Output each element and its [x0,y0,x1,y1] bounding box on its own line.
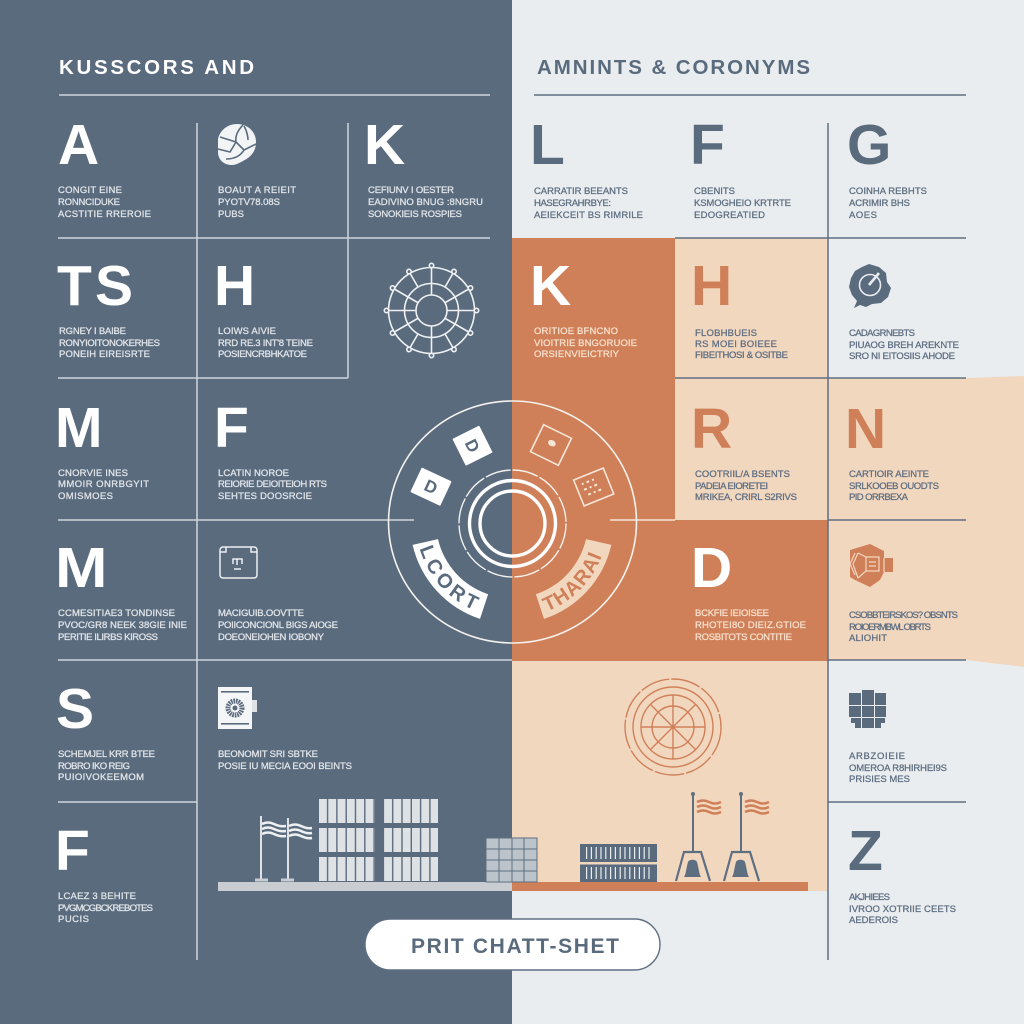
cell: seal [849,264,959,362]
description: OMEROA R8HIRHEI9S [849,763,947,774]
description A: RONNCIDUKE [58,197,120,208]
letter K: K [530,254,571,318]
description F right [694,186,791,221]
description TS: RGNEY I BAIBE [59,326,126,337]
description: DOEONEIOHEN IOBONY [218,632,325,643]
letter D: D [691,536,732,600]
description R: MRIKEA, CRIRL S2RIVS [695,492,797,503]
description F right: EDOGREATIED [694,210,765,221]
letter F: F [690,113,725,177]
letter F: F [214,396,249,460]
description: MACIGUIB.OOVTTE [218,608,304,619]
description H peach [695,328,788,361]
description R: PADEIA EIORETEI [695,481,768,492]
description: ARBZOIEIE [849,751,905,762]
description M second [58,608,187,643]
description M second: PVOC/GR8 NEEK 38GIE INIE [58,620,187,631]
cell: TS [57,254,160,360]
description N: PID ORRBEXA [849,492,909,503]
letters TS: S [95,254,133,318]
description: PIUAOG BREH AREKNTE [849,340,959,351]
tile: D left [410,467,452,506]
letter F: F [55,819,90,883]
tile: D left: D [421,476,440,498]
cell: F [214,396,327,502]
description: PRISIES MES [849,774,910,785]
description H: LOIWS AIVIE [218,326,276,337]
description M: OMISMOES [58,491,113,502]
description TS: RONYIOITONOKERHES [59,338,160,349]
description G: COINHA REBHTS [849,186,927,197]
description: ROIOERMBWL OBRTS [849,622,931,633]
icon: target rings [625,679,721,775]
description [849,751,947,785]
description H [218,326,313,360]
description TS [59,326,160,360]
description A: ACSTITIE RREROIE [58,209,151,220]
dial outer ring [388,401,636,643]
illustration: bell tower 2 [724,792,769,881]
description: ALIOHIT [849,633,887,644]
letter R: R [691,397,732,461]
tile: outlined top right [530,425,572,465]
letter M: M [55,396,102,460]
description [218,185,296,220]
description F bottom: PUCIS [58,914,89,925]
description K: SONOKIEIS ROSPIES [368,209,462,220]
cell: S [56,677,155,783]
description M second: CCMESITIAE3 TONDINSE [58,608,175,619]
description: POSIE IU MECIA EOOI BEINTS [218,761,352,772]
description S: ROBRO IKO REIG [58,761,130,772]
tile: D top: D [461,436,483,456]
description N: CARTIOIR AEINTE [849,469,929,480]
description F bottom: PVGMCGBCKREBOTES [58,903,153,914]
description K: CEFIUNV I OESTER [368,185,454,196]
tile: outlined right [574,468,614,506]
background: left slate half [0,0,512,1024]
description L: AEIEKCEIT BS RIMRILE [534,210,643,221]
illustration: bell tower 1 [676,792,721,881]
description M: MMOIR ONRBGYIT [58,479,149,490]
description A: CONGIT EINE [58,185,122,196]
icon: spoked wheel [384,263,479,358]
description: CSOBBTEIRSKOS? OBSNTS [849,610,958,621]
letters TS: T [57,254,92,318]
description S [58,749,155,783]
tile: D top [452,426,493,466]
description F: SEHTES DOOSRCIE [218,491,312,502]
description F bottom: LCAEZ 3 BEHITE [58,891,136,902]
description H peach: FLOBHBUEIS [695,328,757,339]
description K: EADIVINO BNUG :8NGRU [368,197,483,208]
description TS: PONEIH EIREISRTE [59,349,150,360]
letter G: G [847,113,891,177]
description H peach: RS MOEI BOIEEE [695,339,777,350]
description H: RRD RE.3 INT'8 TEINE [218,338,313,349]
arc label: right: THARAI [541,552,602,610]
central dial [388,400,638,644]
letter M: M [55,536,108,600]
peach region: lower panel [512,660,828,891]
cell: M [55,396,149,502]
peach region: right band [828,376,1024,667]
description M [58,468,149,502]
description D: BCKFIE IEIOISEE [695,608,769,619]
illustration: left flags [255,816,312,880]
description Z [849,892,956,926]
cell: H [214,254,313,360]
orange region: upper block [512,238,675,521]
letter K: K [364,113,405,177]
cell: G [847,113,927,221]
cell: R [691,397,797,503]
ground: left grey [218,882,512,891]
description L [534,186,643,221]
illustration: container stacks [319,799,438,881]
description [849,328,959,362]
description D [695,608,806,643]
heading: right: AMNINTS & CORONYMS [537,56,810,79]
letter S: S [56,677,94,741]
description: BEONOMIT SRI SBTKE [218,749,318,760]
description R [695,469,797,503]
description F right: CBENITS [694,186,735,197]
description D: RHOTEI8O DIEIZ.GTIOE [695,620,806,631]
icon: hexagon badge [850,544,893,587]
cell: globe [218,124,296,220]
letter A: A [58,113,99,177]
cell: F bottom [55,819,153,925]
icon: safe [218,687,257,729]
description M: CNORVIE INES [58,468,128,479]
cell: F right [690,113,791,221]
description: SRO NI EITOSIIS AHODE [849,351,955,362]
description [218,608,338,643]
icon: seal [849,264,891,308]
description L: HASEGRAHRBYE: [534,198,611,209]
illustration: grid crate [486,838,537,882]
description K orange: VIOITRIE BNGORUOIE [534,338,637,349]
letter H: H [214,254,255,318]
cell: A [58,113,151,220]
dial inner rings [470,480,556,566]
letter H: H [691,254,732,318]
illustration: slate container [580,844,657,882]
description N: SRLKOOEB OUODTS [849,481,939,492]
description D: ROSBITOTS CONTITIE [695,632,792,643]
description: BOAUT A REIEIT [218,185,296,196]
description R: COOTRIIL/A BSENTS [695,469,790,480]
description K orange: ORSIENVIEICTRIY [534,349,620,360]
dial dashed ring [459,470,566,577]
cell: H peach [691,254,788,361]
icon: globe [218,124,256,165]
description N [849,469,939,503]
arc label: left: LCORT [420,544,480,608]
description Z: AEDEROIS [849,915,898,926]
cell: Z [848,819,956,926]
letter N: N [845,397,886,461]
description H peach: FIBEITHOSI & OSITBE [695,350,788,361]
cell: M second [55,536,187,643]
description M second: PERITIE ILIRBS KIROSS [58,632,158,643]
icon: grid emblem [849,690,886,728]
description F [218,468,327,502]
description G: ACRIMIR BHS [849,198,910,209]
cell: hexagon [849,544,958,644]
orange region: lower block [512,520,828,661]
description K orange [534,326,637,360]
description F right: KSMOGHEIO KRTRTE [694,198,791,209]
description: PYOTV78.08S [218,197,280,208]
description F bottom [58,891,153,925]
peach region: centre column [675,238,828,528]
button: print cheat sheet: PRIT CHATT-SHET [411,935,619,958]
cell: frame [218,547,338,643]
cell: D [691,536,806,643]
description F: LCATIN NOROE [218,468,289,479]
description A [58,185,151,220]
description S: SCHEMJEL KRR BTEE [58,749,155,760]
cell: K orange [530,254,637,360]
description G: AOES [849,210,877,221]
cell: safe [218,687,352,772]
cell: N [845,397,939,503]
description Z: AKJHIEES [849,892,890,903]
description F: REIORIE DEIOITEIOH RTS [218,479,327,490]
button: print cheat sheet [365,919,660,970]
description Z: IVROO XOTRIIE CEETS [849,904,956,915]
letter Z: Z [848,819,883,883]
description: POIICONCIONL BIGS AIOGE [218,620,338,631]
description G [849,186,927,221]
description [218,749,352,772]
letter L: L [530,113,565,177]
description: CADAGRNEBTS [849,328,915,339]
ground: right orange [512,882,808,891]
description K [368,185,483,220]
cell: L [530,113,643,221]
description L: CARRATIR BEEANTS [534,186,628,197]
cell: grid icon [849,690,947,785]
heading: left: KUSSCORS AND [59,56,254,79]
description H: POSIENCRBHKATOE [218,349,307,360]
icon: frame [220,547,257,578]
description: PUBS [218,209,244,220]
cell: K [364,113,483,220]
description S: PUIOIVOKEEMOM [58,772,144,783]
description K orange: ORITIOE BFNCNO [534,326,618,337]
background: right light half [512,0,1024,1024]
description [849,610,958,644]
